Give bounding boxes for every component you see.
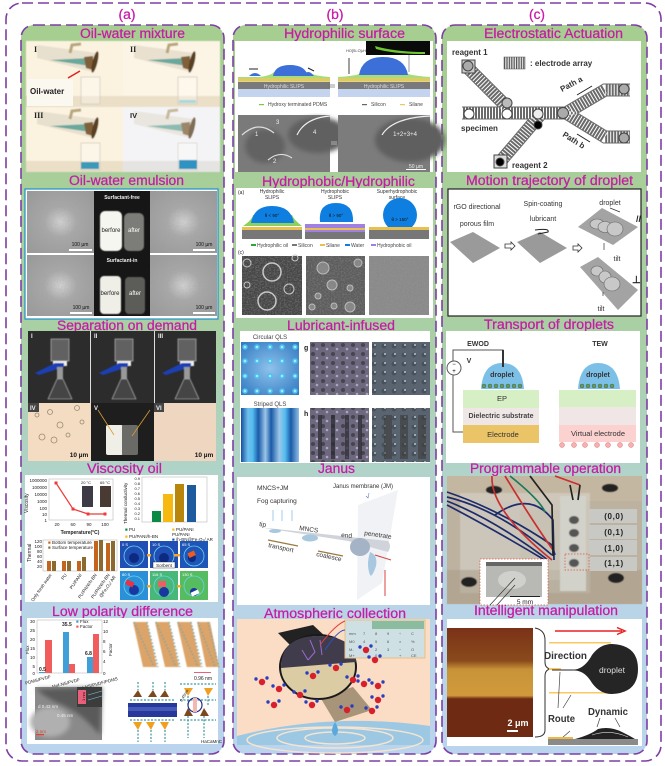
panel: hydrophobic/hydrophilic: SLIPS	[265, 195, 280, 201]
icon: SEM after coalescence	[338, 115, 445, 172]
icon: porous films	[450, 208, 638, 310]
chart: flux and factor bars: 5	[32, 664, 35, 669]
chart: thermal camera images	[120, 541, 208, 600]
panel: lubricant-infused: h	[304, 411, 308, 418]
icon: calculator panel: mm	[349, 631, 356, 636]
chart: flux and factor bars: ■ Factor	[76, 624, 93, 629]
icon: EWOD circuit: EP	[497, 394, 507, 403]
icon: SEM rough surface	[369, 256, 429, 315]
panel: oil-water mixture photos: Oil-water	[30, 87, 64, 96]
chart: flux and factor bars: 10	[103, 629, 109, 634]
icon: TEW stack: Virtual electrode	[571, 429, 625, 438]
icon: right droplet schematic: HO[Si-O]ₙH	[346, 49, 366, 53]
icon: TEM image: 1 nm	[81, 691, 86, 701]
icon: calculator panel: ÷	[399, 631, 402, 636]
icon: TEW stack	[559, 363, 636, 448]
panel: low polarity figures	[25, 618, 223, 744]
chart: viscosity vs temperature: 10	[42, 512, 47, 517]
chart: bottom and surface temperature bars: 40	[37, 559, 42, 564]
panel: Janus membrane schematic: Fog capturing	[257, 498, 297, 505]
icon: calculator panel: +	[399, 653, 402, 658]
arrows: process steps	[505, 242, 582, 252]
chart: flux and factor bars: ■ Flux	[76, 619, 89, 624]
icon: EWOD circuit: −	[452, 362, 456, 368]
chart: thermal camera images: 130 S	[182, 572, 193, 577]
chart: thermal conductivity bars: ■ /h-BN@Fe₂O₃/ AR	[172, 537, 214, 542]
icon: circular QLS dots	[241, 342, 299, 395]
icon: calculator panel: 5	[375, 639, 378, 644]
labels: logic states: (1,1)	[604, 559, 624, 568]
heading: Hydrophobic/Hydrophilic: Hydrophobic/Hydrophilic	[262, 174, 415, 189]
legend: liquids and layers: Silane	[326, 243, 340, 249]
heading: Transport of droplets: Transport of droplets	[484, 317, 614, 332]
icon: SEM before coalescence: 3	[276, 120, 280, 126]
panel: separation photos: VI	[156, 406, 162, 412]
chart: viscosity vs temperature: 90	[86, 522, 92, 527]
icon: droplet array photos	[310, 342, 430, 462]
panel: separation photos: 10 µm	[70, 452, 88, 459]
chart: bottom and surface temperature bars: 80	[37, 549, 42, 554]
chart: thermal conductivity bars: 0.9	[134, 476, 141, 481]
panel: viscosity oil charts	[24, 475, 218, 602]
panel: hydrophobic/hydrophilic: SLIPS	[328, 195, 343, 201]
panel: Janus membrane schematic: penetrate	[364, 530, 392, 541]
icon: calculator panel: ×	[399, 639, 402, 644]
panel: motion trajectory: Spin-coating	[524, 201, 563, 208]
icon: routes and droplet: Dynamic	[588, 707, 628, 718]
panel: emulsion micrographs and vials: 100 µm	[196, 242, 212, 248]
panel: motion trajectory: porous film	[460, 221, 494, 228]
icon: SEM after coalescence: 1+2+3+4	[393, 132, 418, 138]
chart: flux and factor bars: PDMS/PVDF	[25, 674, 51, 686]
panel: lubricant-infused	[240, 331, 430, 463]
chart: bottom and surface temperature bars: 60	[37, 554, 42, 559]
panel: hydrophobic/hydrophilic: surface	[389, 195, 405, 201]
icon: calculator panel	[320, 620, 425, 658]
heading: Lubricant-infused: Lubricant-infused	[287, 318, 395, 333]
chart: thermal conductivity bars: 0.6	[134, 491, 141, 496]
chart: flux and factor bars: 6	[103, 649, 106, 654]
heading: (b): (b)	[326, 7, 344, 22]
chart: flux and factor bars: 25	[30, 628, 35, 633]
panel: emulsion micrographs and vials: berfore	[100, 291, 120, 297]
icon: calculator panel: 9	[387, 631, 390, 636]
panel: low polarity figures: 0.96 nm	[194, 676, 212, 682]
panel: transport of droplets: EWOD	[467, 341, 489, 348]
icon: channels	[462, 66, 630, 162]
chart: bottom and surface temperature bars: @Fe₂O₃/ AR	[98, 574, 117, 598]
chart: flux and factor bars: 12	[103, 619, 109, 624]
chart: thermal camera images: 10 S	[152, 542, 161, 547]
chart: flux and factor bars: 30	[30, 619, 35, 624]
icon: routes and droplet: Direction	[544, 651, 587, 662]
panel: oil-water mixture photos	[26, 41, 220, 172]
arrow: direction	[555, 628, 625, 634]
chart: viscosity vs temperature: 20	[54, 522, 60, 527]
panel: hydrophobic/hydrophilic: (c)	[238, 250, 244, 256]
chart: viscosity vs temperature: Temperature(°C)	[61, 530, 100, 536]
legend: hydrophilic materials: Hydroxy terminated PDMS	[268, 102, 328, 108]
icon: calculator panel: M0	[349, 639, 355, 644]
panel: motion trajectory: lubricant	[530, 216, 556, 223]
icon: calculator panel: M-	[349, 647, 354, 652]
panel: transport of droplets	[446, 331, 640, 463]
chart: thermal conductivity bars: 0.2	[134, 511, 141, 516]
chart: thermal conductivity bars: ■ PU/PANI	[172, 527, 194, 532]
panel: hydrophobic/hydrophilic: Superhydrophobic	[377, 189, 418, 195]
icon: droplets	[462, 60, 629, 168]
icon: calculator panel: M+	[349, 653, 355, 658]
icon: calculator panel: 0	[375, 653, 378, 658]
icon: molecular structure: 0.45nm	[179, 688, 190, 702]
heading: Viscosity oil: Viscosity oil	[87, 461, 162, 476]
legend: liquids and layers: Water	[351, 243, 364, 249]
icon: crystal stacks	[133, 622, 219, 667]
icon: hydrophilic droplet	[242, 206, 302, 239]
panel: motion trajectory: rGO directional	[453, 204, 501, 211]
legend: liquids and layers: Hydrophilic oil	[257, 243, 288, 249]
panel: column c background	[442, 25, 647, 754]
heading: (c): (c)	[529, 7, 545, 22]
chart: bottom and surface temperature bars: Thermal	[27, 544, 33, 562]
heading: Oil-water emulsion: Oil-water emulsion	[69, 173, 184, 188]
panel: motion trajectory: tilt	[614, 256, 621, 263]
chart: thermal camera images: 116 S	[152, 572, 162, 577]
panel: oil-water mixture photos: III	[34, 111, 43, 120]
panel: Janus membrane schematic: tip	[259, 521, 267, 529]
panel: Janus membrane schematic: Janus membrane (JM)	[333, 484, 393, 490]
icon: inset micrograph	[480, 559, 548, 606]
icon: right droplet schematic	[338, 41, 430, 97]
panel: motion trajectory: //	[636, 214, 642, 224]
panel: oil-water mixture photos: I	[34, 45, 37, 54]
heading: Motion trajectory of droplet: Motion trajectory of droplet	[466, 173, 633, 188]
panel: lubricant-infused: Striped QLS	[254, 402, 286, 408]
labels: logic states: (0,0)	[604, 512, 624, 521]
heading: Separation on demand: Separation on demand	[57, 318, 197, 333]
chart: flux and factor bars: 0	[32, 671, 35, 676]
chart: thermal conductivity bars: ■ PU	[125, 527, 135, 532]
icon: calculator panel: 3	[387, 647, 390, 652]
legend: liquids and layers: Silicon	[298, 243, 313, 249]
icon: calculator panel: %	[411, 639, 415, 644]
icon: SEM before coalescence: 1	[255, 132, 259, 138]
icon: SEM before coalescence	[238, 115, 348, 172]
panel: emulsion micrographs and vials: after	[129, 291, 141, 297]
heading: Programmable operation: Programmable operation	[470, 461, 621, 476]
icon: routes and droplet: droplet	[599, 665, 626, 675]
panel: separation photos: I	[31, 334, 33, 340]
panel: transport of droplets: TEW	[592, 341, 608, 348]
chart: viscosity vs temperature: 60	[70, 522, 76, 527]
panel: column b background	[233, 25, 436, 754]
chart: flux and factor bars: 0	[103, 671, 106, 676]
panel: emulsion micrographs and vials: 100 µm	[73, 305, 89, 311]
chart: bottom and surface temperature bars: ■ Bottom temperature	[48, 540, 92, 545]
icon: AFM image: 2 μm	[507, 718, 529, 728]
panel: motion trajectory: ⊥	[632, 275, 641, 286]
panel: electrostatic actuation channels: reagent 2	[512, 161, 548, 170]
panel: hydrophilic surface	[235, 41, 445, 172]
chart: bottom and surface temperature bars: 20	[37, 564, 42, 569]
chart: thermal conductivity bars: 0.8	[134, 481, 141, 486]
icon: SEM after coalescence: 50 µm	[409, 164, 423, 170]
icon: calculator panel: O	[411, 647, 414, 652]
panel: separation photos: IV	[30, 406, 36, 412]
chart: flux and factor bars: 6.8	[85, 651, 92, 657]
heading: Hydrophilic surface: Hydrophilic surface	[284, 26, 405, 41]
chart: thermal conductivity bars: 0.4	[134, 501, 141, 506]
icon: calculator panel: 6	[387, 639, 390, 644]
icon: EWOD circuit: droplet	[490, 372, 515, 379]
panel: electrostatic actuation channels	[447, 41, 641, 172]
icon: wires	[447, 476, 580, 562]
chart: bottom and surface temperature bars: PU	[60, 573, 68, 581]
chart: thermal conductivity bars: 0.3	[134, 506, 141, 511]
chart: flux and factor bars: 35.5	[62, 622, 72, 628]
chart: thermal conductivity bars	[123, 476, 214, 542]
icon: routes and droplet: Route	[548, 714, 575, 725]
panel: motion trajectory: droplet	[599, 200, 621, 207]
icon: SEM before coalescence: 2	[273, 159, 277, 165]
icon: superhydrophobic droplet: θ > 150°	[392, 217, 409, 222]
icon: AFM image	[447, 628, 533, 737]
chart: flux and factor bars: Factor	[108, 643, 113, 656]
icon: TEM image: 0.45 nm	[57, 713, 74, 718]
chart: flux and factor bars: 15	[30, 646, 35, 651]
icon: magnifier	[280, 635, 356, 699]
icon: striped QLS	[241, 408, 299, 462]
chart: thermal conductivity bars: 0.1	[134, 516, 141, 521]
icon: EWOD circuit: Dielectric substrate	[469, 413, 534, 420]
panel: emulsion micrographs and vials: Surfactant-in	[107, 258, 137, 264]
panel: oil-water mixture photos: II	[130, 45, 136, 54]
icon: inset micrograph: 5 mm	[517, 599, 533, 606]
chart: bottom and surface temperature bars: ■ Surface temperature	[48, 545, 93, 550]
panel: emulsion micrographs and vials: Surfactant-free	[104, 195, 140, 201]
panel: atmospheric collection	[237, 619, 430, 753]
icon: molecular structure	[128, 682, 223, 744]
chart: flux and factor bars: Flux	[25, 645, 30, 654]
panel: emulsion micrographs and vials: 100 µm	[196, 305, 212, 311]
chart: thermal camera images: 65 S	[182, 542, 191, 547]
panel: Janus membrane schematic: end	[341, 532, 353, 540]
icon: EWOD circuit: Electrode	[487, 430, 519, 439]
heading: Janus: Janus	[318, 461, 355, 476]
legend: liquids and layers	[251, 243, 411, 249]
heading: Atmospheric collection: Atmospheric collection	[264, 606, 406, 621]
chart: flux and factor bars: 0.5	[39, 667, 46, 673]
icon: SEM ring image two	[306, 256, 365, 315]
panel: oil-water mixture photos: IV	[130, 111, 137, 120]
chart: thermal camera images: 80 S	[122, 572, 131, 577]
panel: electrostatic actuation channels: reagent 1	[452, 48, 488, 57]
chart: viscosity vs temperature: 65 °C	[100, 480, 110, 485]
icon: calculator panel: 7	[363, 631, 366, 636]
icon: water ripples	[237, 721, 430, 753]
panel: hydrophobic/hydrophilic: (a)	[238, 190, 244, 196]
icon: hydrophobic droplet: θ > 90°	[329, 213, 343, 218]
panel: motion trajectory: tilt	[598, 306, 605, 313]
icon: TEM image	[30, 687, 102, 740]
panel: Janus membrane schematic	[237, 477, 430, 605]
icon: EWOD circuit: +	[452, 369, 456, 375]
panel: Janus membrane schematic: MNCS	[299, 525, 319, 535]
icon: calculator panel: 2	[375, 647, 378, 652]
panel: programmable operation photo	[447, 476, 642, 606]
icon: SEM before coalescence: 4	[313, 130, 317, 136]
icon: molecular structure: HaCaMnC	[201, 739, 223, 744]
icon: EWOD circuit	[447, 350, 539, 443]
panel: electrostatic actuation channels: Path a	[559, 74, 585, 94]
icon: EWOD circuit: V	[467, 358, 472, 365]
labels: logic states: (1,0)	[604, 544, 624, 553]
chart: flux and factor bars: Mof-NS/PVDF/PDMS	[76, 676, 118, 692]
chart: bottom and surface temperature bars: Only fresh water	[30, 572, 53, 602]
chart: bottom and surface temperature bars: 120	[34, 539, 42, 544]
icon: dark top film	[278, 625, 340, 660]
chart: flux and factor bars: Mof-NS/PVDF	[51, 677, 80, 689]
panel: emulsion micrographs and vials	[25, 189, 218, 319]
chart: thermal conductivity bars: 0.5	[134, 496, 141, 501]
chart: viscosity vs temperature: 20 °C	[81, 480, 91, 485]
chart: viscosity vs temperature: Viscosity	[24, 493, 30, 513]
icon: calculator panel: C	[411, 631, 414, 636]
panel: emulsion micrographs and vials: berfore	[101, 228, 121, 234]
chart: viscosity vs temperature: 100000	[32, 485, 47, 490]
panel: Janus membrane schematic: coalesce	[316, 551, 343, 563]
panel: separation photos: 10 µm	[195, 452, 213, 459]
chart: flux and factor bars: 10	[30, 655, 35, 660]
icon: calculator panel: 8	[375, 631, 378, 636]
panel: separation photos: V	[94, 406, 98, 412]
chart: viscosity vs temperature: 100	[101, 522, 109, 527]
chart: viscosity vs temperature: 1000	[37, 499, 47, 504]
chart: bottom and surface temperature bars: PU/PANI/h-BN	[90, 573, 111, 599]
chart: thermal conductivity bars: 0.7	[134, 486, 141, 491]
icon: TEM image: d 0.43 nm	[38, 704, 58, 709]
panel: electrostatic actuation channels: : electrode array	[530, 59, 593, 68]
icon: hydrophobic droplet	[305, 203, 365, 239]
chart: bottom and surface temperature bars: PU/PANI	[69, 573, 83, 590]
heading: Low polarity difference: Low polarity difference	[52, 604, 193, 619]
legend: hydrophilic materials: Silane	[409, 102, 423, 108]
panel: separation photos: III	[158, 334, 163, 340]
panel: Janus membrane schematic: transport	[268, 542, 294, 554]
chart: flux and factor bars	[25, 619, 118, 692]
icon: hydrophilic droplet: θ < 90°	[265, 213, 279, 218]
chart: thermal conductivity bars: ■ PU/PANI/h-BN	[125, 534, 158, 539]
panel: electrostatic actuation channels: Path b	[561, 130, 587, 151]
panel: emulsion micrographs and vials: 100 µm	[72, 242, 88, 248]
panel: lubricant-infused: g	[304, 345, 308, 352]
panel: Janus membrane schematic: MNCS+JM	[257, 485, 289, 492]
panel: column a background	[21, 25, 224, 754]
icon: collection membrane	[320, 687, 372, 722]
icon: routes and droplet	[544, 642, 638, 745]
chart: bottom and surface temperature bars: PU/PANI/h-BN	[77, 573, 98, 599]
icon: water molecules	[254, 644, 385, 714]
chart: flux and factor bars: 4	[103, 659, 106, 664]
icon: SEM ring image one	[242, 255, 302, 315]
labels: logic states: (0,1)	[604, 528, 624, 537]
chart: thermal camera images: Sorbent	[156, 563, 173, 568]
chart: bottom and surface temperature bars: 100	[34, 544, 42, 549]
heading: Electrostatic Actuation: Electrostatic Actuation	[484, 26, 623, 41]
icon: TEW stack: droplet	[586, 372, 611, 379]
icon: right droplet schematic: Hydrophilic SLIPS	[364, 84, 405, 90]
panel: lubricant-infused: Circular QLS	[253, 335, 287, 341]
icon: calculator panel: CE	[411, 653, 417, 658]
chart: flux and factor bars: 20	[30, 637, 35, 642]
icon: TEM image: 2 nm	[36, 729, 46, 734]
chart: viscosity vs temperature: 1000000	[29, 478, 47, 483]
icon: calculator panel: 4	[363, 639, 366, 644]
labels: logic states	[589, 509, 637, 571]
chart: viscosity vs temperature: 1	[44, 518, 47, 523]
heading: Oil-water mixture: Oil-water mixture	[80, 26, 185, 41]
panel: hydrophobic/hydrophilic: Hydrophilic	[260, 189, 285, 195]
chart: thermal conductivity bars: Thermal conductivity	[123, 482, 128, 524]
icon: superhydrophobic droplet	[369, 198, 429, 239]
chart: viscosity vs temperature: 10000	[34, 492, 47, 497]
heading: (a): (a)	[118, 7, 136, 22]
icon: calculator panel: −	[399, 647, 402, 652]
chart: bottom and surface temperature bars	[27, 539, 117, 602]
icon: left droplet schematic: Hydrophilic SLIPS	[264, 84, 305, 90]
chart: thermal conductivity bars: PU/PANI	[172, 532, 190, 537]
panel: emulsion micrographs and vials: after	[128, 228, 140, 234]
panel: separation photos: II	[94, 334, 98, 340]
icon: left droplet schematic	[238, 65, 330, 97]
panel: electrostatic actuation channels: specimen	[461, 124, 498, 133]
chart: viscosity vs temperature	[24, 478, 113, 536]
legend: hydrophilic materials	[259, 102, 423, 108]
icon: calculator panel: 1	[363, 647, 366, 652]
legend: liquids and layers: Hydrophobic oil	[377, 243, 411, 249]
panel: separation photos	[28, 331, 216, 461]
panel: hydrophobic/hydrophilic: Hydrophobic	[321, 189, 350, 195]
heading: Intelligent manipulation: Intelligent manipulation	[474, 603, 618, 618]
chart: viscosity vs temperature: 100	[39, 506, 47, 511]
legend: hydrophilic materials: Silicon	[371, 102, 386, 108]
chart: thermal camera images: 0 S	[122, 542, 128, 547]
panel: intelligent manipulation	[447, 619, 642, 746]
panel: hydrophobic/hydrophilic	[236, 188, 433, 318]
chart: flux and factor bars: 8	[103, 639, 106, 644]
panel: motion trajectory	[448, 189, 642, 316]
